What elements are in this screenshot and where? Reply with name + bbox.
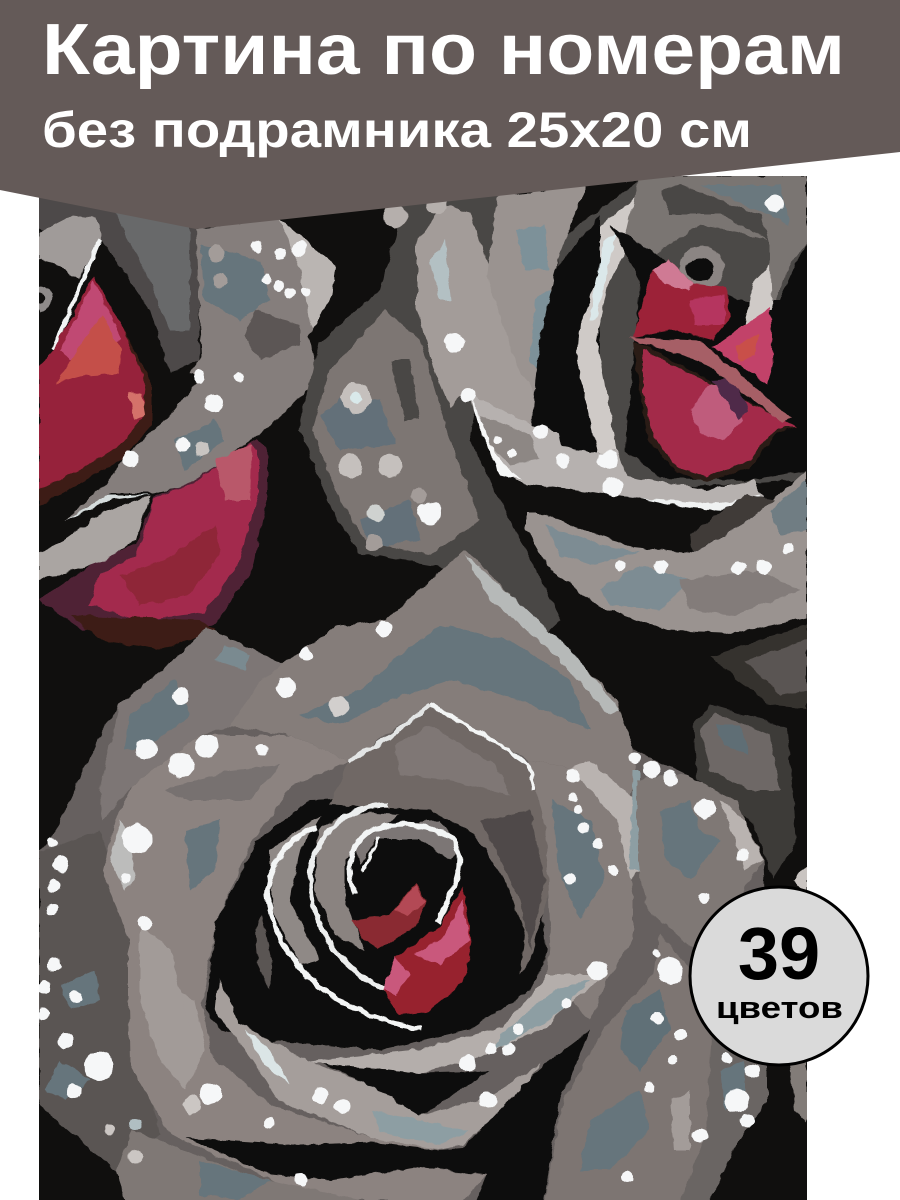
badge caption: цветов: [716, 990, 843, 1025]
middle grey petal: [299, 190, 562, 640]
top-right rose: [378, 176, 807, 1123]
dark gap: [205, 795, 546, 1050]
rose spiral highlights: [267, 827, 422, 1029]
colour count badge: [690, 887, 868, 1065]
right petals: [530, 760, 633, 1020]
top banner: [0, 0, 900, 229]
dew drops: [38, 194, 793, 1185]
subtitle: без подрамника 25х20 см: [42, 102, 752, 158]
painting: black roses with dew: [38, 176, 807, 1200]
title: Картина по номерам: [42, 10, 845, 90]
badge number: 39: [738, 912, 820, 995]
top-left rose: [39, 190, 336, 650]
bottom large rose: [39, 550, 770, 1200]
